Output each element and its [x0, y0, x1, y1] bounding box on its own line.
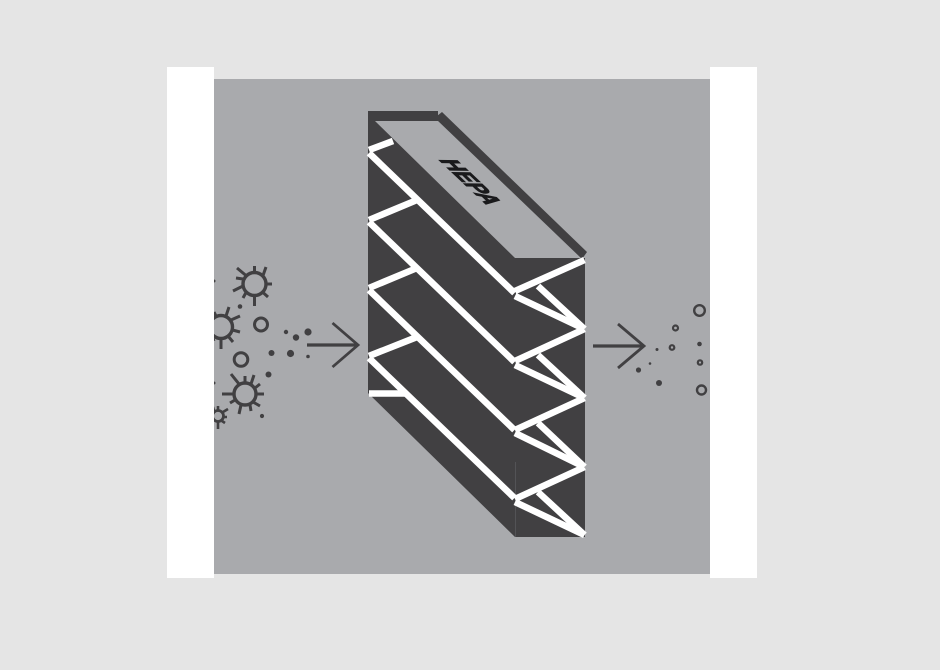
arrow: into filter — [307, 323, 358, 367]
incoming small dots — [212, 280, 312, 418]
filter body — [368, 111, 587, 537]
ring particle 2 — [234, 353, 248, 366]
top edge strip — [437, 112, 587, 259]
ring particle 1 — [254, 318, 268, 331]
white pleats — [369, 141, 584, 535]
corner seam — [514, 462, 516, 537]
filter dark casing — [368, 111, 585, 537]
left white band — [167, 67, 214, 578]
germ 3 — [222, 374, 264, 414]
gray panel — [214, 79, 710, 574]
HEPA label: HEPA — [433, 158, 506, 206]
outgoing particles — [636, 305, 706, 394]
incoming particles — [210, 266, 272, 429]
right white band — [710, 67, 757, 578]
outgoing rings — [670, 305, 706, 394]
germ 2 — [210, 307, 240, 349]
germ 4 — [212, 406, 228, 429]
arrow: out of filter — [593, 324, 644, 368]
outgoing dots — [636, 342, 702, 386]
germ 1 — [233, 266, 272, 306]
